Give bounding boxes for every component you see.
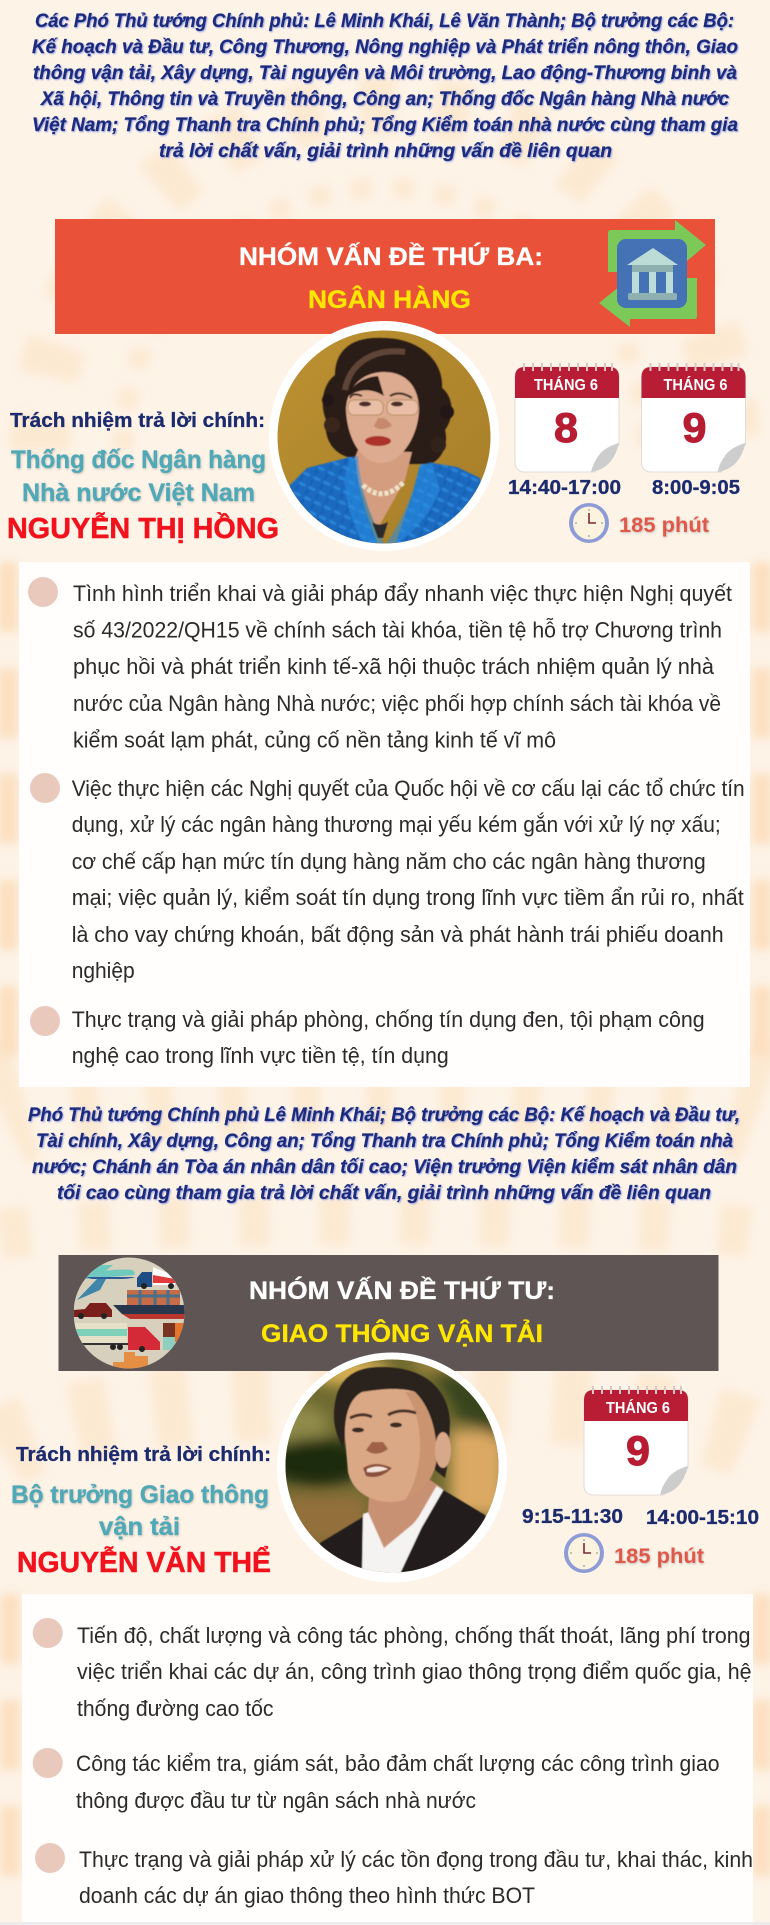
duration label: 185 phút <box>614 1545 704 1568</box>
responsible official: first group: Thống đốc Ngân hàng <box>11 446 266 474</box>
bullet item two: dụng, xử lý các ngân hàng thương mại yếu kém gắn với xử lý nợ xấu; <box>72 812 721 837</box>
responsible official: second group: Bộ trưởng Giao thông <box>11 1481 269 1509</box>
calendar: June 9 <box>642 363 746 472</box>
bullet item three: doanh các dự án giao thông theo hình thức BOT <box>79 1883 535 1908</box>
portrait: Nguyễn Thị Hồng <box>269 321 500 551</box>
bullet item two: mại; việc quản lý, kiểm soát tín dụng trong lĩnh vực tiềm ẩn rủi ro, nhất <box>72 885 744 910</box>
intro text: first group of officials: Việt Nam; Tổng Thanh tra Chính phủ; Tổng Kiểm toán nhà nước cùng tham gia <box>32 115 738 136</box>
icon: bank with green arrows <box>599 220 706 327</box>
calendar: June 9: 9 <box>682 404 706 451</box>
bullet item two: Việc thực hiện các Nghị quyết của Quốc hội về cơ cấu lại các tổ chức tín <box>72 776 745 801</box>
icon: clock <box>564 1533 604 1573</box>
bullet item one <box>33 1618 751 1721</box>
calendar: June 9 second group: 9 <box>626 1427 650 1474</box>
bullet item one: thống đường cao tốc <box>77 1696 274 1721</box>
calendar: June 9: THÁNG 6 <box>664 375 728 394</box>
bullet item two <box>33 1748 719 1813</box>
intro text: second group of officials: Tài chính, Xây dựng, Công an; Tổng Thanh tra Chính phủ; Tổng Kiểm toán nhà <box>36 1131 733 1152</box>
bullet item two <box>30 773 745 983</box>
intro text: first group of officials: Các Phó Thủ tướng Chính phủ: Lê Minh Khái, Lê Văn Thành; Bộ trưởng các Bộ: <box>35 11 734 32</box>
intro text: first group of officials: thông vận tải, Xây dựng, Tài nguyên và Môi trường, Lao động-Thương binh và <box>33 63 737 84</box>
intro text: second group of officials: tối cao cùng tham gia trả lời chất vấn, giải trình những vấn đề liên quan <box>57 1183 711 1204</box>
bullet item one: nước của Ngân hàng Nhà nước; việc phối hợp chính sách tài khóa về <box>73 691 721 716</box>
responsible official: first group: Trách nhiệm trả lời chính: <box>10 410 265 432</box>
banner title: NHÓM VẤN ĐỀ THỨ TƯ: <box>249 1275 555 1305</box>
banner title: NGÂN HÀNG <box>308 284 471 314</box>
bullet item one: việc triển khai các dự án, công trình giao thông trọng điểm quốc gia, hệ <box>77 1659 752 1684</box>
intro text: first group of officials: Kế hoạch và Đầu tư, Công Thương, Nông nghiệp và Phát triển nông thôn, Giao <box>32 37 738 58</box>
duration label: 185 phút <box>619 514 709 537</box>
bullet item one: kiểm soát lạm phát, củng cố nền tảng kinh tế vĩ mô <box>73 728 556 752</box>
responsible official: second group: vận tải <box>99 1513 180 1541</box>
calendar: June 8: 8 <box>554 404 578 451</box>
bullet item two: cơ chế cấp hạn mức tín dụng hàng năm cho các ngân hàng thương <box>72 849 706 874</box>
bullet item one: Tiến độ, chất lượng và công tác phòng, chống thất thoát, lãng phí trong <box>77 1623 750 1648</box>
responsible official: second group: NGUYỄN VĂN THỂ <box>17 1545 271 1579</box>
calendar: June 8: THÁNG 6 <box>534 375 598 394</box>
portrait: Nguyễn Văn Thể <box>268 1352 507 1582</box>
responsible official: second group <box>11 1444 271 1579</box>
banner title: GIAO THÔNG VẬN TẢI <box>261 1318 543 1348</box>
bullet item two: thông được đầu tư từ ngân sách nhà nước <box>76 1788 476 1813</box>
bullet item three: nghệ cao trong lĩnh vực tiền tệ, tín dụng <box>72 1043 449 1068</box>
banner: group four, transport <box>58 1255 718 1371</box>
bullet item three: Thực trạng và giải pháp xử lý các tồn đọng trong đầu tư, khai thác, kinh <box>79 1847 753 1872</box>
panel: transport issues <box>22 1594 753 1922</box>
bullet item two: Công tác kiểm tra, giám sát, bảo đảm chất lượng các công trình giao <box>76 1751 720 1776</box>
intro text: second group of officials <box>28 1105 740 1204</box>
responsible official: first group: NGUYỄN THỊ HỒNG <box>7 511 279 545</box>
time slots: second group: 14:00-15:10 <box>646 1507 759 1529</box>
bullet item one: số 43/2022/QH15 về chính sách tài khóa, tiền tệ hỗ trợ Chương trình <box>73 618 722 642</box>
bullet item one: phục hồi và phát triển kinh tế-xã hội thuộc trách nhiệm quản lý nhà <box>73 654 715 679</box>
bullet item one: Tình hình triển khai và giải pháp đẩy nhanh việc thực hiện Nghị quyết <box>73 581 732 606</box>
icon: clock <box>569 503 609 543</box>
responsible official: first group <box>7 410 279 545</box>
bullet item two: nghiệp <box>72 958 135 983</box>
panel: banking issues <box>19 562 750 1087</box>
time slots: second group: 9:15-11:30 <box>522 1506 623 1528</box>
banner title <box>239 241 543 314</box>
intro text: second group of officials: Phó Thủ tướng Chính phủ Lê Minh Khái; Bộ trưởng các Bộ: Kế hoạch và Đầu tư, <box>28 1105 740 1126</box>
bullet item three <box>30 1006 705 1068</box>
intro text: first group of officials <box>32 11 738 162</box>
banner title: NHÓM VẤN ĐỀ THỨ BA: <box>239 241 543 271</box>
time slots: second group <box>522 1506 759 1529</box>
time slots: first group: 14:40-17:00 <box>508 477 621 499</box>
bullet item two: là cho vay chứng khoán, bất động sản và phát hành trái phiếu doanh <box>72 922 724 947</box>
banner title <box>249 1275 555 1348</box>
calendar: June 9 second group: THÁNG 6 <box>606 1398 670 1417</box>
intro text: first group of officials: Xã hội, Thông tin và Truyền thông, Công an; Thống đốc Ngân hàng Nhà nước <box>40 89 729 110</box>
calendar: June 9 second group <box>584 1386 688 1495</box>
bullet item three: Thực trạng và giải pháp phòng, chống tín dụng đen, tội phạm công <box>72 1007 705 1032</box>
bullet item three <box>35 1843 753 1908</box>
intro text: second group of officials: nước; Chánh án Tòa án nhân dân tối cao; Viện trưởng Viện kiểm sát nhân dân <box>32 1157 737 1178</box>
responsible official: first group: Nhà nước Việt Nam <box>22 479 255 507</box>
time slots: first group: 8:00-9:05 <box>652 477 740 499</box>
responsible official: second group: Trách nhiệm trả lời chính: <box>16 1444 271 1466</box>
time slots: first group <box>508 477 740 499</box>
intro text: first group of officials: trả lời chất vấn, giải trình những vấn đề liên quan <box>159 141 612 162</box>
banner: group three, banking <box>55 219 715 334</box>
bullet item one <box>28 577 732 752</box>
calendar: June 8 <box>515 363 619 472</box>
icon: transport circle <box>74 1257 186 1369</box>
